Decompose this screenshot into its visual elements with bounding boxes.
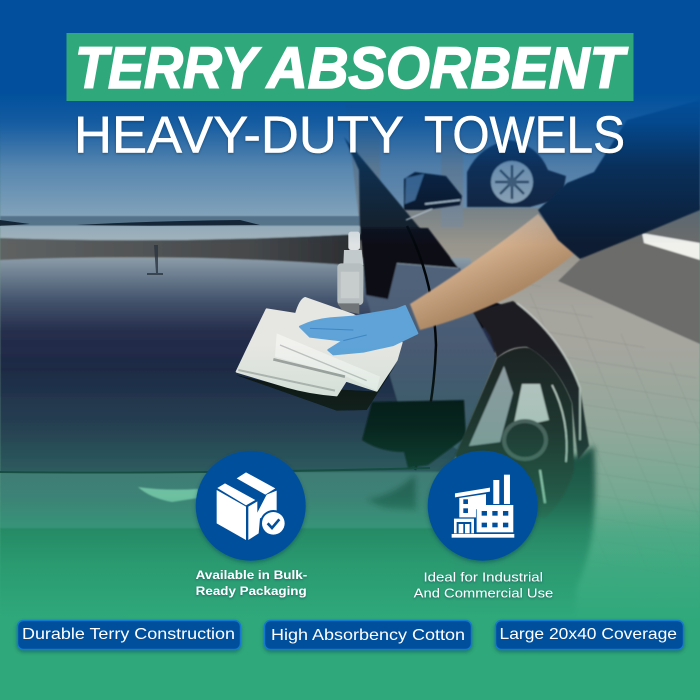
subtitle: TOWELS xyxy=(424,106,625,164)
caption: Ready Packaging xyxy=(196,584,307,598)
A-pillar window xyxy=(344,137,428,240)
title banner xyxy=(66,33,634,101)
lower strip under windshield xyxy=(0,226,360,240)
badge: high absorbency cotton: High Absorbency Cotton xyxy=(271,627,465,644)
panel lines xyxy=(407,226,436,470)
badge: large coverage: Large 20x40 Coverage xyxy=(500,626,677,643)
reflection below hood line xyxy=(366,475,416,510)
car emblem xyxy=(138,487,198,502)
sleeve xyxy=(538,100,700,259)
windshield base strip xyxy=(0,216,360,226)
icon: factory xyxy=(428,451,538,561)
title banner: TERRY xyxy=(75,36,262,101)
wipers xyxy=(0,220,260,226)
dark reflection band xyxy=(0,234,360,266)
badge: durable terry construction xyxy=(18,620,240,650)
feature: bulk packaging xyxy=(196,451,307,598)
badge: large coverage xyxy=(496,620,684,650)
feature: industrial use xyxy=(414,451,553,600)
windshield xyxy=(0,100,360,228)
caption xyxy=(414,570,553,600)
hood base xyxy=(0,258,500,472)
forearm xyxy=(410,214,574,330)
towel xyxy=(237,298,402,395)
showroom floor and wall xyxy=(0,100,700,625)
lighter right hood panel xyxy=(366,264,497,450)
caption xyxy=(196,568,307,598)
subtitle xyxy=(74,106,625,164)
top blue gradient overlay xyxy=(0,0,700,245)
spray bottle xyxy=(337,232,363,314)
side mirror xyxy=(404,172,462,220)
subtitle: HEAVY-DUTY xyxy=(74,106,404,164)
badge: high absorbency cotton xyxy=(264,620,472,650)
car flank near wheel xyxy=(455,446,595,640)
caption: Ideal for Industrial xyxy=(424,570,543,584)
caption: And Commercial Use xyxy=(414,586,553,600)
bottom green gradient overlay xyxy=(0,345,700,620)
title banner: ABSORBENT xyxy=(265,36,628,101)
caption: Available in Bulk- xyxy=(196,568,307,582)
area below hood line xyxy=(0,472,500,640)
towel reflection xyxy=(236,363,397,411)
parked car in background xyxy=(467,140,566,207)
car hood xyxy=(0,226,520,640)
icon: cardboard box xyxy=(196,451,306,561)
headlight xyxy=(455,347,574,518)
background photo: car being wiped xyxy=(0,100,700,640)
dark right shoulder of hood xyxy=(360,228,510,330)
blue glove xyxy=(300,306,417,354)
reflection of the arm on the hood xyxy=(362,400,466,468)
fender xyxy=(473,301,589,460)
towel and glove xyxy=(236,298,417,411)
bottom green band xyxy=(0,620,700,700)
mast reflection xyxy=(147,245,163,275)
badge: durable terry construction: Durable Terry Construction xyxy=(22,626,235,643)
